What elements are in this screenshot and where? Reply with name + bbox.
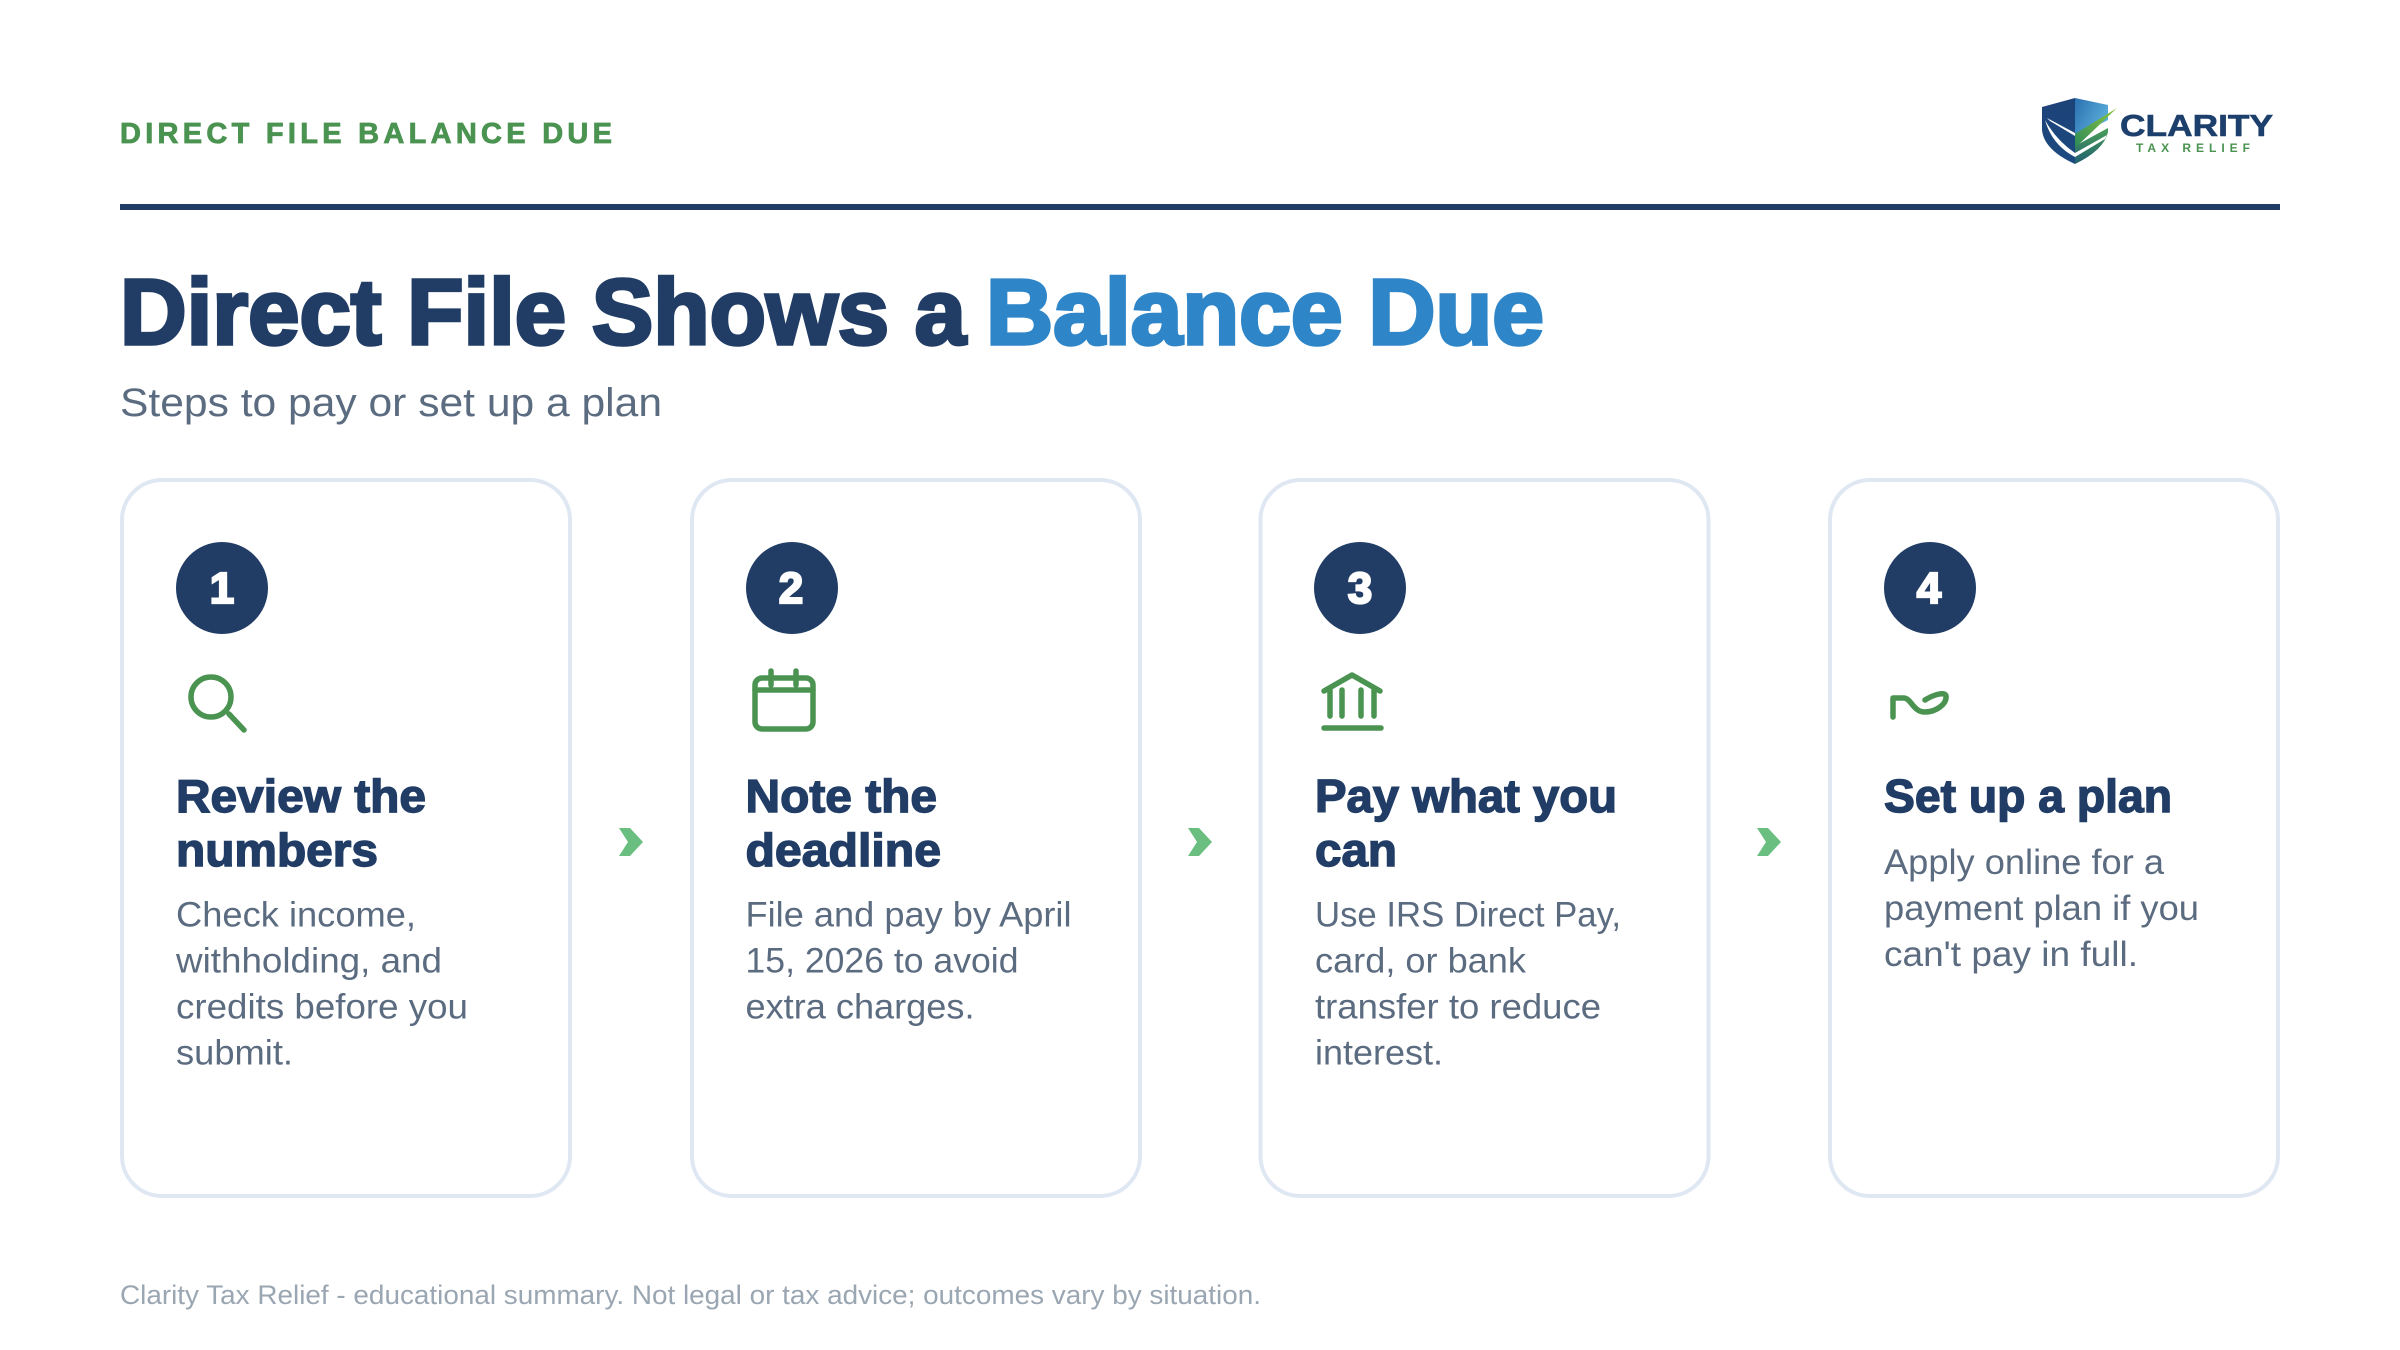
description: 15, 2026 to avoid [746,942,1018,980]
step number 3 [1314,542,1406,634]
heading: can [1315,824,1397,876]
card 2: note the deadline [692,480,1140,1196]
step number 3: 3 [1348,564,1372,613]
description: extra charges. [746,988,974,1026]
step number 4: 4 [1917,564,1942,613]
heading: Set up a plan [1884,770,2172,822]
heading [176,770,426,876]
description: interest. [1315,1034,1443,1072]
description: transfer to reduce [1315,988,1601,1026]
description: credits before you [176,988,468,1026]
footer disclaimer: Clarity Tax Relief - educational summary. Not legal or tax advice; outcomes vary by situation. [120,1280,1261,1310]
step number 1: 1 [210,564,234,613]
description: File and pay by April [746,896,1072,934]
eyebrow label: DIRECT FILE BALANCE DUE [120,118,612,150]
step number 2 [746,542,838,634]
description: payment plan if you [1884,889,2199,928]
description: submit. [176,1034,293,1072]
heading: Note the [746,770,937,822]
step number 1 [176,542,268,634]
logo: Clarity Tax Relief: CLARITY [2120,108,2273,143]
description [1884,843,2199,974]
heading: Review the [176,770,426,822]
step number 4 [1884,542,1976,634]
heading [746,770,941,876]
icon: magnifying glass [191,677,244,730]
heading: deadline [746,824,941,876]
icon: hand / plan [1893,694,1946,717]
description: Use IRS Direct Pay, [1315,896,1621,934]
heading: Pay what you [1315,770,1617,822]
title: Balance Due [986,260,1544,364]
logo: Clarity Tax Relief [2042,98,2273,164]
description: Check income, [176,896,416,934]
arrow 1 [619,828,643,856]
description [746,896,1072,1026]
step number 2: 2 [779,564,803,613]
header rule [120,204,2280,210]
arrow 3 [1757,828,1781,856]
card 4: set up a plan [1830,480,2278,1196]
title: Direct File Shows a [120,260,967,364]
description: withholding, and [175,942,442,980]
description: can't pay in full. [1884,935,2138,974]
description [175,896,468,1072]
description: card, or bank [1315,942,1527,980]
heading: numbers [176,824,378,876]
card 3: pay what you can [1260,480,1708,1196]
card 1: review the numbers [122,480,570,1196]
description [1315,896,1621,1072]
icon: calendar [755,671,813,729]
arrow 2 [1188,828,1212,856]
description: Apply online for a [1884,843,2165,882]
heading [1315,770,1617,876]
icon: bank [1324,675,1381,728]
logo: Clarity Tax Relief: TAX RELIEF [2136,141,2250,155]
subtitle: Steps to pay or set up a plan [120,381,662,425]
